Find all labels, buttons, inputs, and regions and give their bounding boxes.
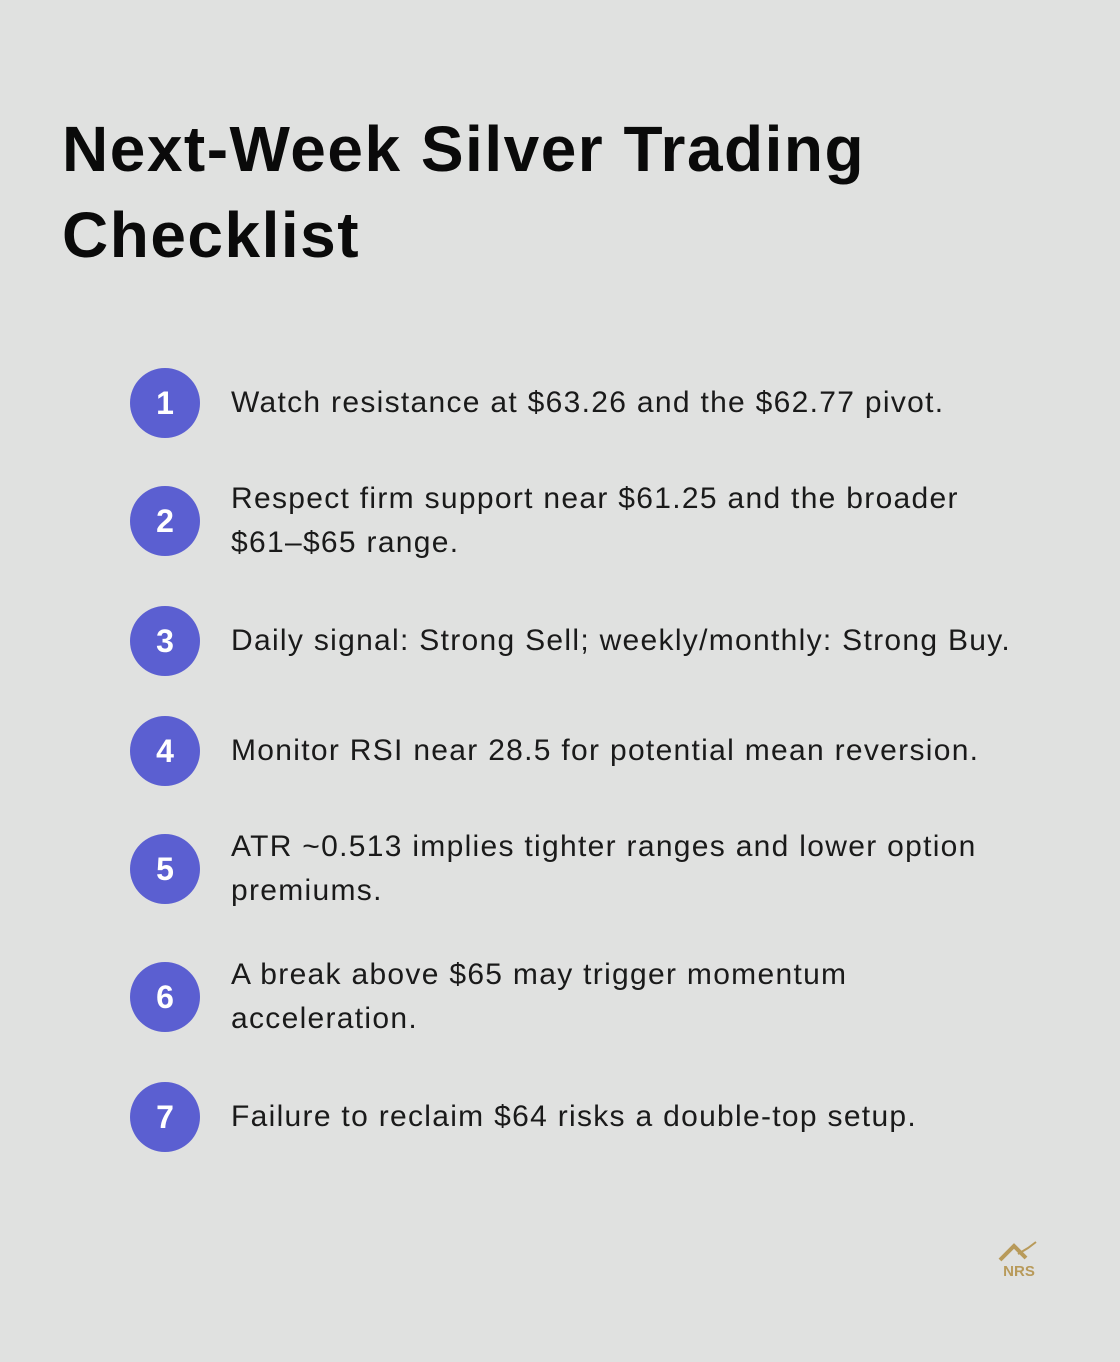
item 2: $61–$65 range. (231, 526, 459, 559)
item 2 (130, 482, 959, 559)
item 5 (130, 830, 977, 907)
item 2: 2 (156, 503, 174, 539)
item 6: A break above $65 may trigger momentum (231, 958, 847, 991)
item 7 (130, 1082, 917, 1152)
item 3: 3 (156, 623, 174, 659)
item 5: ATR ~0.513 implies tighter ranges and lower option (231, 830, 977, 863)
item 5: premiums. (231, 874, 383, 907)
item 4: Monitor RSI near 28.5 for potential mean reversion. (231, 734, 979, 767)
title: Checklist (62, 199, 360, 271)
item 7: 7 (156, 1099, 174, 1135)
item 3: Daily signal: Strong Sell; weekly/monthly: Strong Buy. (231, 624, 1011, 657)
title (62, 113, 865, 271)
item 5: 5 (156, 851, 174, 887)
item 1 (130, 368, 944, 438)
item 6: acceleration. (231, 1002, 418, 1035)
item 3 (130, 606, 1011, 676)
item 6: 6 (156, 979, 174, 1015)
item 1: 1 (156, 385, 174, 421)
logo: NRS: NRS (1003, 1263, 1035, 1280)
item 1: Watch resistance at $63.26 and the $62.77 pivot. (231, 386, 944, 419)
item 2: Respect firm support near $61.25 and the broader (231, 482, 959, 515)
item 7: Failure to reclaim $64 risks a double-top setup. (231, 1100, 917, 1133)
item 6 (130, 958, 847, 1035)
title: Next-Week Silver Trading (62, 113, 865, 185)
logo: NRS (998, 1241, 1036, 1280)
item 4 (130, 716, 979, 786)
item 4: 4 (156, 733, 174, 769)
